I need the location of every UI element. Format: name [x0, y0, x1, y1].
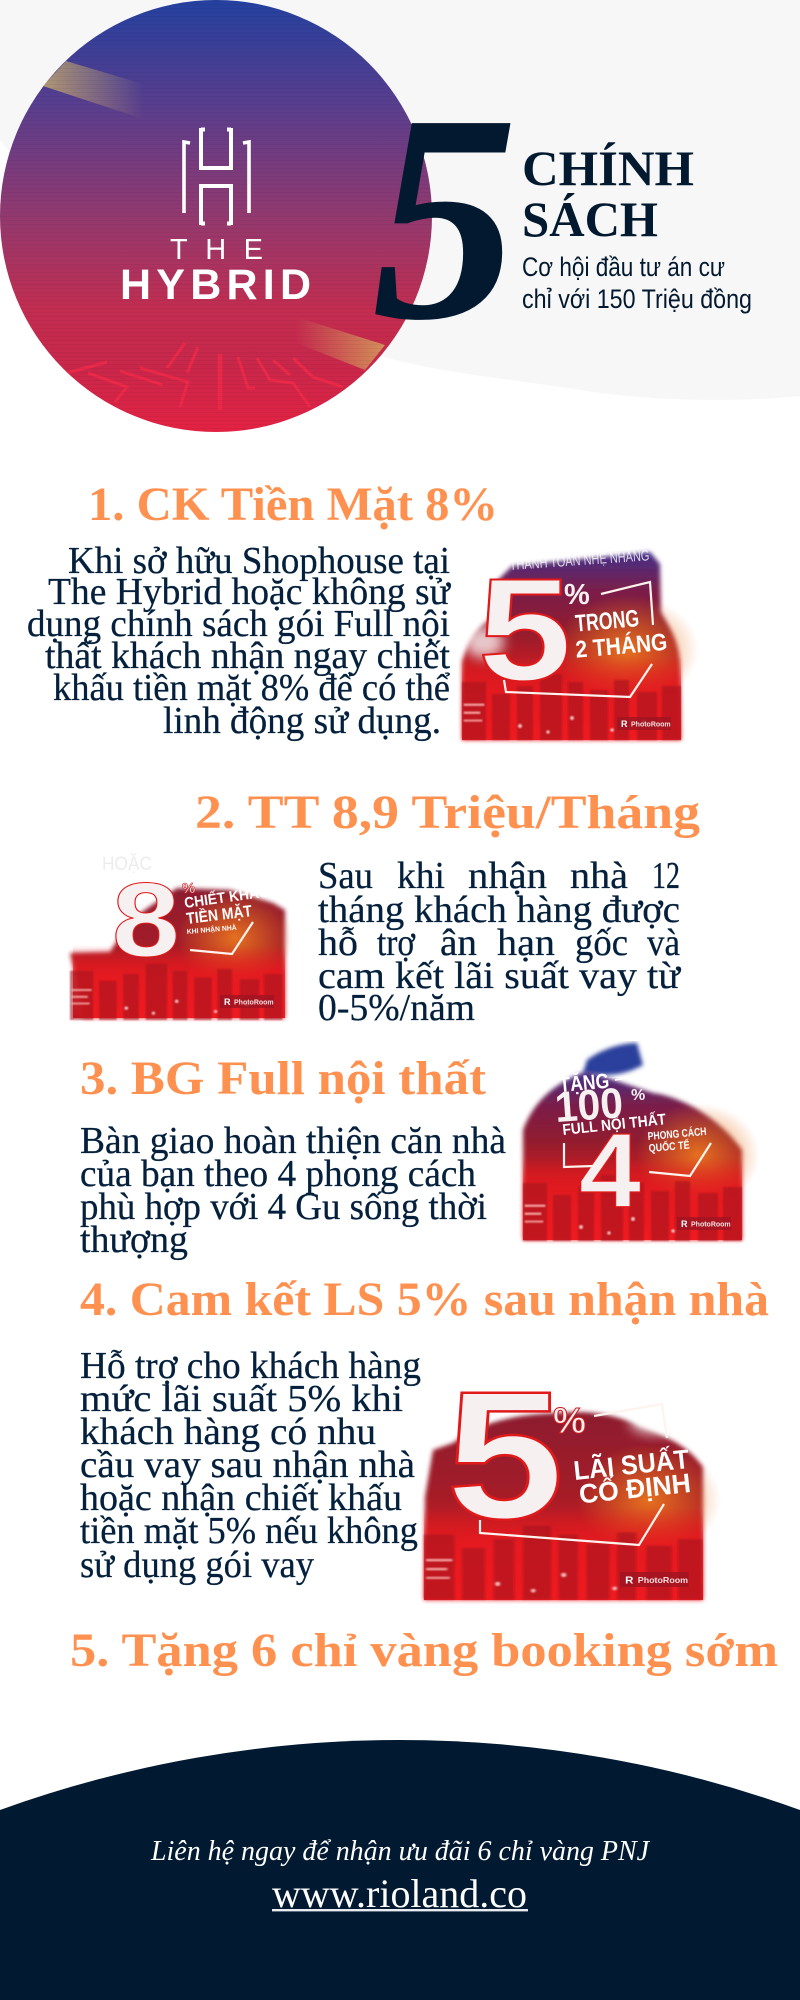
subtitle: [522, 252, 752, 314]
paragraph 3: thượng: [80, 1219, 188, 1261]
promo image 2: 8% chiết khấu tiền mặt: [70, 854, 293, 1020]
heading 2: 2. TT 8,9 Triệu/Tháng: [195, 786, 700, 839]
logo wordmark HYBRID: HYBRID: [120, 261, 311, 309]
promo image 4: 5% lãi suất cố định: CỐ ĐỊNH: [577, 1466, 692, 1509]
promo image 2: 8% chiết khấu tiền mặt: %: [182, 880, 195, 897]
circuit pattern: [60, 343, 343, 410]
subtitle: Cơ hội đầu tư án cư: [522, 252, 725, 282]
heading 5: 5. Tặng 6 chỉ vàng booking sớm: [70, 1624, 778, 1677]
promo image 4: 5% lãi suất cố định: LÃI SUẤT: [572, 1443, 691, 1486]
heading 1: 1. CK Tiền Mặt 8%: [88, 478, 498, 531]
paragraph 2: và: [647, 922, 680, 964]
promo image 3: tặng 100% full nội thất: FULL NỘI THẤT: [562, 1110, 667, 1139]
paragraph 2: 12: [652, 855, 680, 897]
promo image 2: 8% chiết khấu tiền mặt: 8: [112, 862, 180, 979]
paragraph 1: dụng chính sách gói Full nội: [27, 603, 450, 645]
header grey background: [0, 0, 800, 400]
promo image 2: 8% chiết khấu tiền mặt: KHI NHẬN NHÀ: [186, 923, 237, 936]
promo image 3: tặng 100% full nội thất: QUỐC TẾ: [648, 1137, 690, 1155]
paragraph 1: Khi sở hữu Shophouse tại: [68, 540, 450, 582]
heading 3: 3. BG Full nội thất: [80, 1052, 486, 1105]
footer call to action: Liên hệ ngay để nhận ưu đãi 6 chỉ vàng PNJ: [150, 1835, 650, 1867]
logo wordmark THE: THE: [170, 234, 263, 266]
promo image 2: 8% chiết khấu tiền mặt: TIỀN MẶT: [185, 901, 253, 928]
promo image 1: 5% trong 2 tháng: %: [564, 579, 590, 611]
paragraph 1: thất khách nhận ngay chiết: [45, 635, 450, 677]
paragraph 2: Sau: [318, 855, 373, 897]
promo image 3: tặng 100% full nội thất: %: [631, 1087, 645, 1104]
promo image 3: tặng 100% full nội thất: 100: [553, 1079, 625, 1132]
promo image 2: 8% chiết khấu tiền mặt: CHIẾT KHẤU: [183, 883, 270, 912]
paragraph 4: sử dụng gói vay: [80, 1544, 314, 1586]
promo image 3: tặng 100% full nội thất: 4: [579, 1112, 641, 1230]
paragraph 4: hoặc nhận chiết khấu: [80, 1477, 402, 1519]
paragraph 4: Hỗ trợ cho khách hàng: [80, 1345, 421, 1387]
promo image 3: tặng 100% full nội thất: [523, 1043, 760, 1241]
promo image 1: 5% trong 2 tháng: THANH TOÁN NHẸ NHÀNG: [509, 547, 650, 574]
paragraph 2: gốc: [575, 922, 628, 964]
paragraph 2: cam kết lãi suất vay từ: [318, 955, 681, 997]
paragraph 2: khi: [397, 855, 445, 897]
paragraph 4: mức lãi suất 5% khi: [80, 1378, 403, 1420]
light streak bottom-right: [304, 320, 385, 370]
promo image 4: 5% lãi suất cố định: 5: [446, 1353, 564, 1557]
promo image 4: 5% lãi suất cố định: %: [553, 1400, 586, 1441]
paragraph 3: phù hợp với 4 Gu sống thời: [80, 1186, 487, 1228]
promo image 1: 5% trong 2 tháng: 2 THÁNG: [574, 628, 668, 664]
paragraph 2: ân: [440, 922, 477, 964]
paragraph 2: hỗ: [318, 922, 358, 964]
promo image 4: 5% lãi suất cố định: [424, 1353, 721, 1600]
title: chính sách: SÁCH: [522, 191, 658, 247]
paragraph 4: [80, 1345, 421, 1586]
paragraph 1: linh động sử dụng.: [163, 700, 441, 742]
paragraph 2: nhận: [468, 855, 547, 897]
paragraph 2: hạn: [497, 922, 555, 964]
footer panel: [0, 1740, 800, 2000]
paragraph 3: Bàn giao hoàn thiện căn nhà: [80, 1120, 506, 1162]
title: chính sách: CHÍNH: [522, 140, 694, 196]
paragraph 3: [80, 1120, 506, 1261]
footer website link: www.rioland.co: [272, 1871, 527, 1916]
promo image 1: 5% trong 2 tháng: 5: [478, 548, 572, 711]
paragraph 1: [27, 540, 451, 742]
paragraph 3: của bạn theo 4 phong cách: [80, 1153, 476, 1195]
light streak top-left: [44, 61, 135, 116]
paragraph 2: trợ: [377, 922, 416, 964]
paragraph 2: [318, 855, 681, 1029]
paragraph 4: tiền mặt 5% nếu không: [80, 1510, 418, 1552]
title: chính sách: [522, 140, 694, 247]
paragraph 1: khấu tiền mặt 8% để có thể: [53, 667, 450, 709]
logo circle: [0, 0, 432, 432]
paragraph 2: tháng khách hàng được: [318, 889, 680, 931]
paragraph 1: The Hybrid hoặc không sử: [48, 571, 451, 613]
heading 4: 4. Cam kết LS 5% sau nhận nhà: [80, 1273, 769, 1326]
promo image 3: tặng 100% full nội thất: TẶNG: [558, 1070, 610, 1097]
promo image 1: 5% trong 2 tháng: TRONG: [574, 605, 640, 638]
paragraph 2: nhà: [570, 855, 628, 897]
promo image 3: tặng 100% full nội thất: PHONG CÁCH: [647, 1125, 707, 1143]
subtitle: chỉ với 150 Triệu đồng: [522, 284, 752, 314]
icon: H logo mark: [184, 128, 249, 225]
paragraph 4: khách hàng có nhu: [80, 1411, 376, 1453]
promo image 1: 5% trong 2 tháng: [462, 547, 699, 740]
paragraph 4: cầu vay sau nhận nhà: [80, 1444, 415, 1486]
promo image 2: 8% chiết khấu tiền mặt: HOẶC: [102, 854, 152, 875]
paragraph 2: 0-5%/năm: [318, 987, 475, 1029]
big numeral 5: 5: [372, 54, 518, 382]
